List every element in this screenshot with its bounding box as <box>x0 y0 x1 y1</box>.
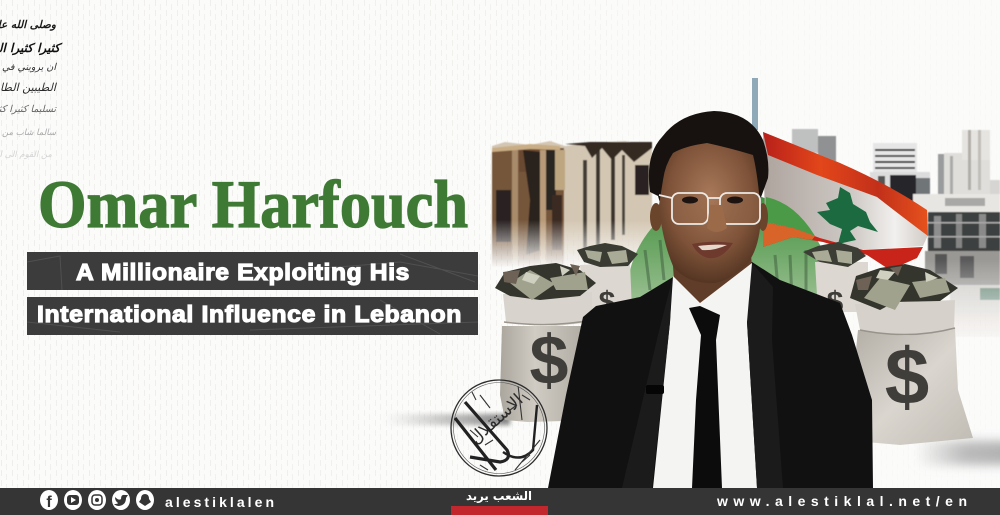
suit jacket <box>548 262 873 488</box>
silo streaks on circle <box>645 240 806 300</box>
front-right money bag: $ <box>885 332 929 421</box>
subtitle banner: line 2 <box>27 297 478 335</box>
subtitle banner: line 1: A Millionaire Exploiting His <box>76 259 410 285</box>
lapel microphone <box>646 385 664 394</box>
mouth <box>692 242 733 258</box>
calligraphic logo seal: الاستقلال <box>466 390 527 449</box>
calligraphy manuscript fragment <box>0 19 63 160</box>
black tie <box>689 306 722 488</box>
flag pole <box>752 78 758 130</box>
money pile <box>850 264 958 310</box>
front-left money bag <box>495 263 600 422</box>
back-left money bag <box>577 243 638 319</box>
Beirut port silos <box>492 141 652 275</box>
website url: www.alestiklal.net/en <box>716 493 967 509</box>
nose <box>707 205 727 232</box>
lapels <box>622 263 783 488</box>
Beirut city skyline <box>792 129 1000 337</box>
red tab <box>451 506 548 515</box>
social icons <box>40 490 154 511</box>
front-right money bag <box>850 264 973 445</box>
man in black suit <box>548 111 873 488</box>
hair <box>649 111 768 210</box>
title: Omar Harfouch <box>38 166 468 242</box>
back-right money bag: $ <box>827 286 844 319</box>
back-left money bag: $ <box>599 286 616 319</box>
subtitle banner: line 2: International Influence in Lebanon <box>37 301 462 327</box>
face <box>659 143 761 283</box>
green circle <box>627 192 833 312</box>
eyes <box>682 196 698 204</box>
front-left money bag: $ <box>530 321 568 399</box>
subtitle banner: line 1 <box>27 252 478 290</box>
glasses <box>659 193 760 224</box>
ground shadows <box>385 414 1000 465</box>
white shirt <box>653 263 757 488</box>
back-right money bag <box>803 242 868 319</box>
Lebanese flag <box>763 132 928 270</box>
social icons: f <box>46 494 52 511</box>
social handle: alestiklalen <box>165 494 274 510</box>
money pile <box>495 263 596 300</box>
footer bar <box>0 488 1000 515</box>
calligraphic logo seal <box>451 380 547 476</box>
footer slogan: الشعب يريد <box>466 489 532 503</box>
cedar tree <box>817 187 878 244</box>
neck <box>672 240 752 306</box>
ears <box>650 203 768 231</box>
